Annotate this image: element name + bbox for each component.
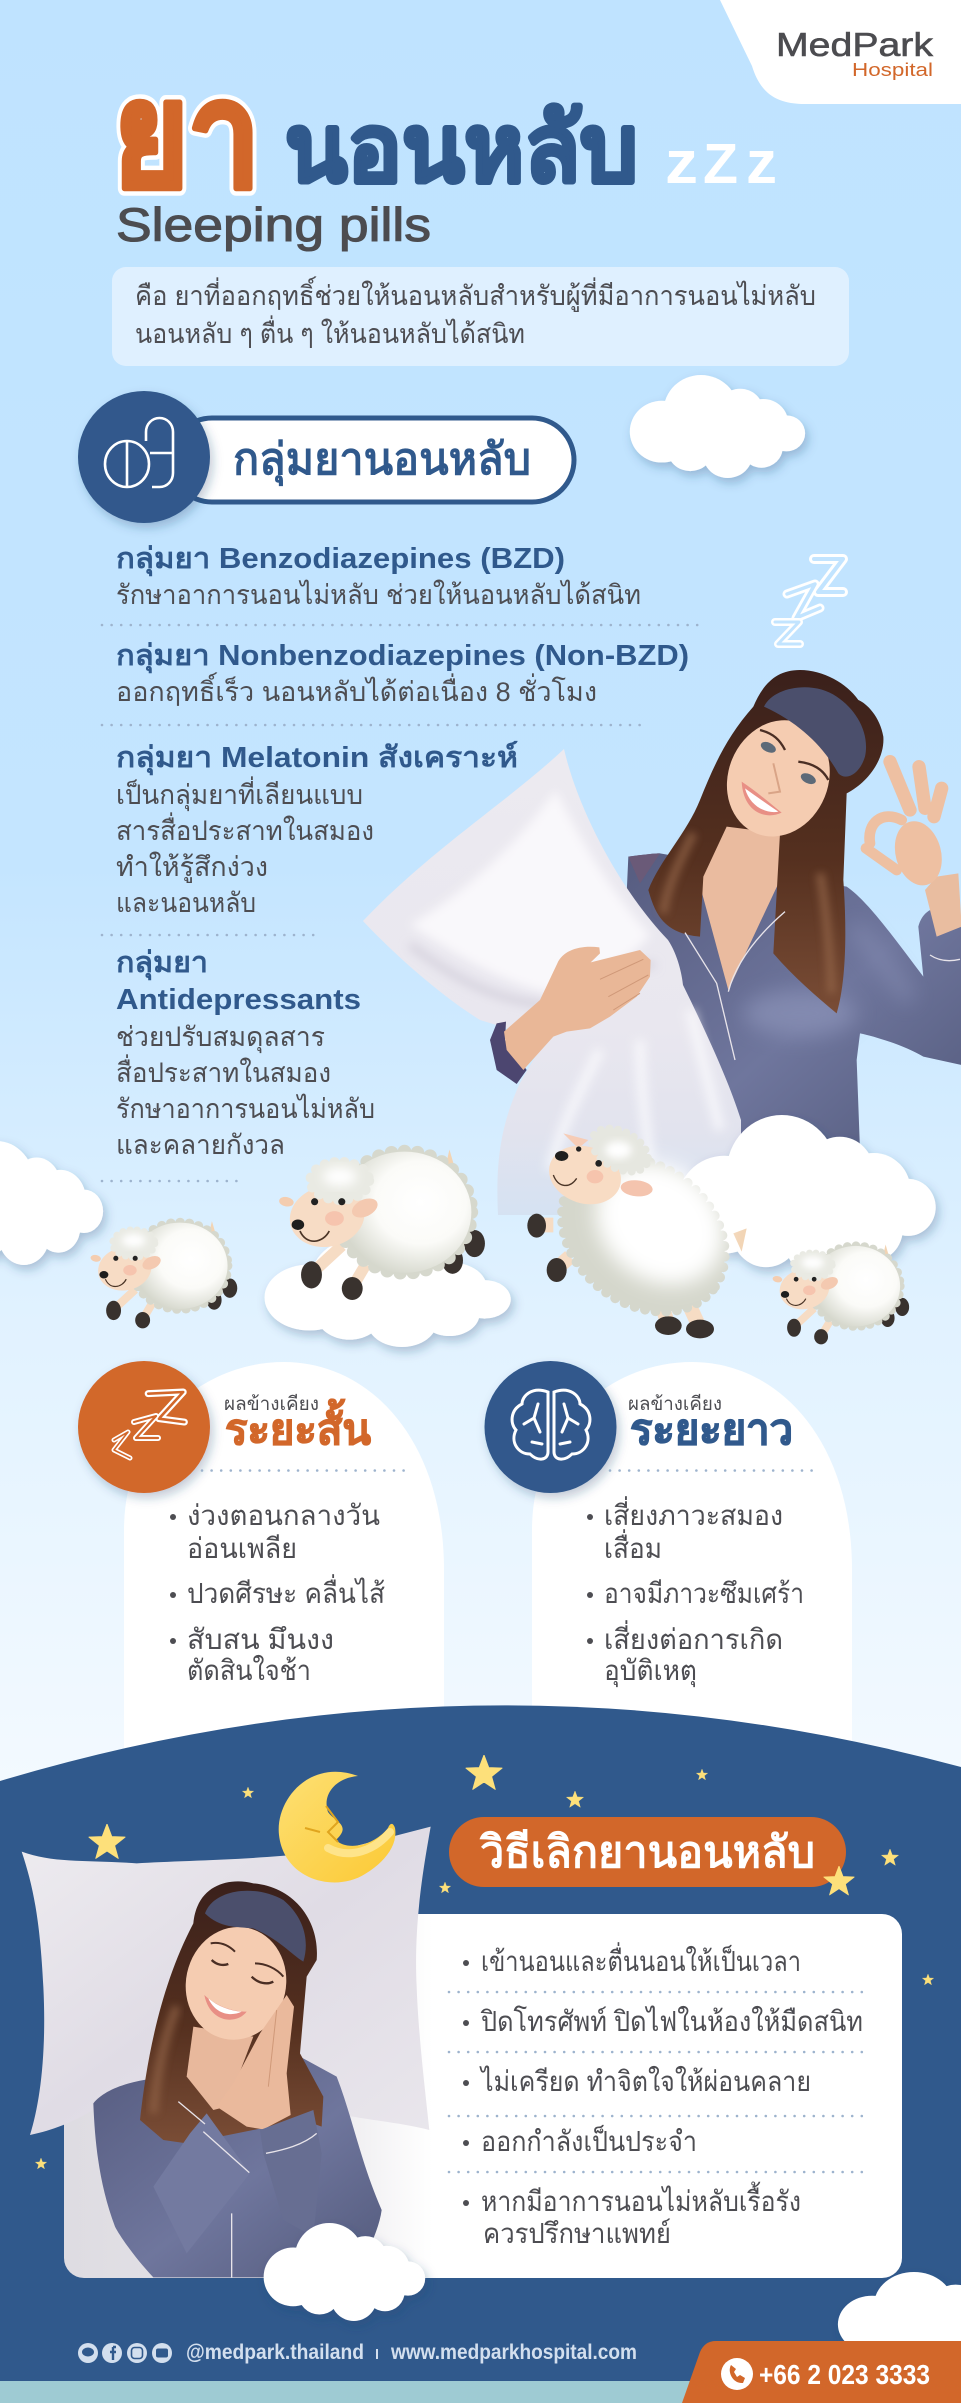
bottom teal strip — [0, 2381, 961, 2403]
definition box: นอนหลับ ๆ ตื่น ๆ ให้นอนหลับได้สนิท — [135, 315, 525, 349]
drug group: Melatonin: ทำให้รู้สึกง่วง — [116, 851, 268, 883]
drug group: Melatonin: สารสื่อประสาทในสมอง — [116, 812, 374, 846]
white card — [64, 1914, 902, 2278]
drug group: Antidepressants: กลุ่มยา — [116, 947, 208, 980]
icon: brain — [512, 1390, 590, 1459]
title: ยา — [114, 54, 260, 217]
pillow — [22, 1827, 431, 2135]
list: อุบัติเหตุ — [604, 1655, 697, 1688]
panel: short-term side effects: ระยะสั้น — [225, 1398, 371, 1453]
heading pill — [449, 1817, 854, 1895]
pillow — [363, 749, 741, 1215]
heading: sleeping pill groups — [78, 391, 574, 523]
sheep 2 — [278, 1149, 485, 1300]
drug group: Melatonin: และนอนหลับ — [116, 888, 256, 918]
arm and hand — [490, 947, 651, 1084]
panel: long-term side effects — [484, 1361, 852, 1800]
moon — [279, 1772, 395, 1882]
sheep 1 — [90, 1221, 237, 1328]
heading pill: วิธีเลิกยานอนหลับ — [479, 1828, 815, 1877]
list — [170, 1500, 385, 1686]
definition box — [112, 267, 849, 366]
panel: short-term side effects — [78, 1361, 444, 1800]
sleeping woman — [93, 1881, 382, 2277]
advice list: ปิดโทรศัพท์ ปิดไฟในห้องให้มืดสนิท — [480, 2005, 863, 2037]
icon: zzz — [775, 559, 843, 644]
title: Sleeping pills — [116, 198, 431, 251]
cloud left — [0, 1141, 103, 1265]
logo: Hospital — [852, 60, 933, 80]
advice list: ควรปรึกษาแพทย์ — [483, 2218, 671, 2249]
panel: long-term side effects: ระยะยาว — [630, 1406, 793, 1453]
drug group: Non-BZD: กลุ่มยา Nonbenzodiazepines (Non-BZD) — [116, 640, 689, 673]
list: เสี่ยงต่อการเกิด — [604, 1620, 783, 1655]
cloud top right — [630, 375, 805, 478]
woman body — [627, 670, 961, 1150]
drug group: BZD: รักษาอาการนอนไม่หลับ ช่วยให้นอนหลับได้สนิท — [116, 579, 641, 610]
cloud center — [264, 1237, 511, 1347]
drug group: Antidepressants: และคลายกังวล — [116, 1130, 285, 1160]
definition box: คือ ยาที่ออกฤทธิ์ช่วยให้นอนหลับสำหรับผู้ที่มีอาการนอนไม่หลับ — [135, 276, 816, 312]
list — [587, 1496, 804, 1688]
drug group: Melatonin — [116, 740, 518, 918]
social handle and website — [186, 2341, 637, 2364]
drug group: BZD: กลุ่มยา Benzodiazepines (BZD) — [116, 543, 565, 576]
advice list — [449, 1942, 863, 2249]
drug group: Antidepressants: ช่วยปรับสมดุลสาร — [116, 1022, 325, 1054]
drug group: Antidepressants: รักษาอาการนอนไม่หลับ — [116, 1094, 375, 1124]
title — [114, 54, 777, 251]
list: สับสน มึนงง — [187, 1624, 334, 1655]
drug group: Antidepressants: Antidepressants — [116, 984, 361, 1016]
drug group: Antidepressants: สื่อประสาทในสมอง — [116, 1054, 331, 1088]
advice list: ออกกำลังเป็นประจำ — [481, 2124, 697, 2157]
cloud corner — [838, 2272, 961, 2367]
list: ง่วงตอนกลางวัน — [187, 1500, 380, 1531]
title: นอนหลับ — [285, 96, 638, 201]
title: Z — [703, 132, 738, 196]
panel: short-term side effects: ผลข้างเคียง — [224, 1393, 319, 1415]
drug group: Non-BZD — [116, 640, 689, 707]
sheep 4 — [772, 1245, 909, 1344]
title: z — [665, 129, 698, 196]
list: ตัดสินใจช้า — [187, 1654, 311, 1686]
stars — [35, 1755, 934, 2169]
panel: how to stop sleeping pills — [0, 1705, 961, 2381]
drug group: Antidepressants — [116, 947, 375, 1160]
heading: sleeping pill groups: กลุ่มยานอนหลับ — [233, 435, 531, 487]
advice list: เข้านอนและตื่นนอนให้เป็นเวลา — [481, 1942, 801, 1977]
drug group: BZD — [116, 543, 641, 610]
drug group: Non-BZD: ออกฤทธิ์เร็ว นอนหลับได้ต่อเนื่อง 8 ชั่วโมง — [116, 672, 597, 707]
cloud right — [677, 1115, 936, 1278]
list: ปวดศีรษะ คลื่นไส้ — [187, 1574, 385, 1609]
woman holding pillow — [363, 670, 961, 1215]
social handle and website: www.medparkhospital.com — [390, 2341, 637, 2364]
logo — [720, 0, 961, 104]
social handle and website: @medpark.thailand — [186, 2341, 364, 2364]
title: z — [746, 129, 777, 196]
title: ยา — [114, 54, 260, 217]
drug group: Melatonin: เป็นกลุ่มยาที่เลียนแบบ — [116, 776, 363, 812]
advice list: หากมีอาการนอนไม่หลับเรื้อรัง — [481, 2181, 801, 2217]
social icons — [78, 2343, 172, 2363]
list: อ่อนเพลีย — [187, 1533, 297, 1564]
list: เสื่อม — [604, 1529, 662, 1564]
cloud bottom — [264, 2223, 425, 2321]
drug group: Melatonin: กลุ่มยา Melatonin สังเคราะห์ — [116, 740, 518, 775]
panel: long-term side effects: ผลข้างเคียง — [628, 1393, 722, 1415]
logo: MedPark — [776, 26, 934, 63]
phone block: +66 2 023 3333 — [759, 2359, 930, 2390]
sheep 3 — [527, 1120, 755, 1343]
advice list: ไม่เครียด ทำจิตใจให้ผ่อนคลาย — [479, 2065, 811, 2097]
list: อาจมีภาวะซึมเศร้า — [604, 1578, 804, 1609]
phone block — [682, 2341, 961, 2403]
list: เสี่ยงภาวะสมอง — [604, 1496, 783, 1531]
icon: zzz — [114, 1390, 186, 1458]
